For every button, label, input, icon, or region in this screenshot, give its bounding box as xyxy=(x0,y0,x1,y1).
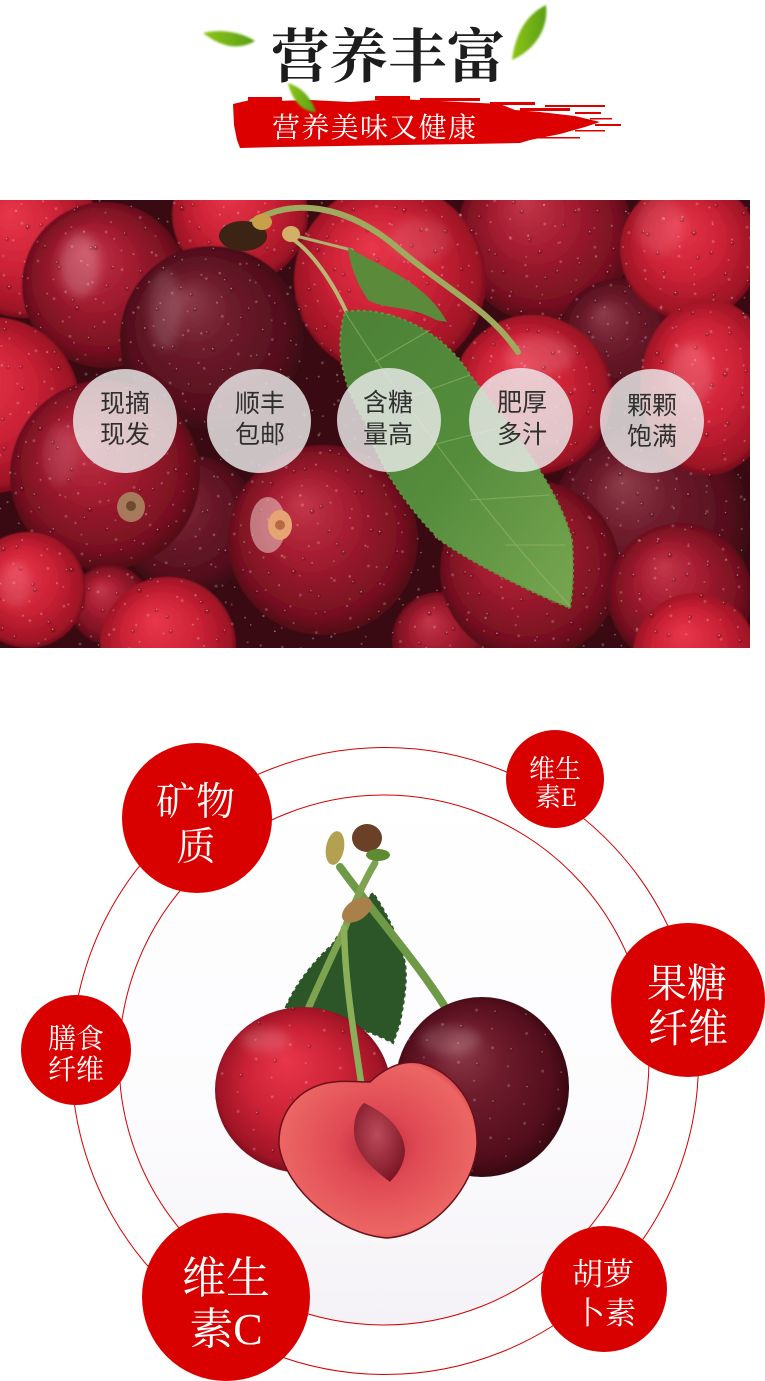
inner ring with photo background xyxy=(119,795,649,1325)
title text: 营养丰富 xyxy=(271,25,505,90)
node: 胡萝卜素: 胡萝 xyxy=(572,1257,634,1292)
badge: 含糖量高: 含糖 xyxy=(363,389,413,417)
badge: 肥厚多汁 xyxy=(469,368,573,472)
badge: 顺丰包邮: 顺丰 xyxy=(235,390,285,418)
outer ring xyxy=(72,748,698,1374)
large leaf xyxy=(340,311,573,608)
badge: 顺丰包邮 xyxy=(207,369,311,473)
node: 维生素E: 素E xyxy=(535,783,577,812)
badge: 肥厚多汁: 多汁 xyxy=(497,421,547,449)
cherry pit xyxy=(354,1103,405,1182)
small leaf xyxy=(348,247,447,322)
node: 维生素E xyxy=(506,730,604,828)
badge: 顺丰包邮: 包邮 xyxy=(235,421,285,449)
node: 果糖纤维 xyxy=(611,923,765,1077)
node: 膳食纤维: 膳食 xyxy=(48,1023,104,1055)
node: 维生素E: 维生 xyxy=(529,755,581,784)
badge: 颗颗饱满: 颗颗 xyxy=(627,392,677,420)
node: 胡萝卜素: 卜素 xyxy=(574,1296,636,1331)
right cherry xyxy=(395,997,569,1177)
node: 矿物质 xyxy=(122,743,272,893)
badge: 现摘现发: 现发 xyxy=(100,421,150,449)
leaf veins xyxy=(345,312,570,606)
water droplets xyxy=(0,200,750,648)
node: 矿物质: 矿物 xyxy=(156,781,236,824)
middle stem xyxy=(344,928,361,1082)
node: 膳食纤维 xyxy=(21,995,131,1105)
badge: 现摘现发: 现摘 xyxy=(100,390,150,418)
badge: 肥厚多汁: 肥厚 xyxy=(497,389,547,417)
panel: nutrient ring diagram xyxy=(21,730,765,1381)
right stem xyxy=(340,867,450,1015)
badge: 颗颗饱满 xyxy=(600,369,704,473)
node: 果糖纤维: 纤维 xyxy=(648,1006,728,1051)
icon: middle leaf xyxy=(288,83,316,112)
node: 胡萝卜素 xyxy=(541,1226,667,1352)
photo: three cherries xyxy=(215,824,569,1238)
badge: 颗颗饱满: 饱满 xyxy=(627,423,677,451)
subtitle text: 营养美味又健康 xyxy=(272,112,476,144)
node: 维生素C: 素C xyxy=(189,1305,263,1354)
brush stroke banner xyxy=(233,96,621,148)
node: 维生素C xyxy=(142,1213,310,1381)
panel: cherry photo with feature badges xyxy=(0,147,765,717)
left cherry xyxy=(215,1007,391,1173)
badge: 含糖量高: 量高 xyxy=(363,421,413,449)
icon: right leaf xyxy=(512,5,546,60)
node: 果糖纤维: 果糖 xyxy=(647,961,727,1006)
header: title block xyxy=(203,5,621,148)
cut half cherry xyxy=(279,1062,477,1238)
cherry cluster xyxy=(0,200,750,648)
stems xyxy=(252,208,518,352)
dark leaf xyxy=(286,893,406,1043)
node: 矿物质: 质 xyxy=(176,826,216,869)
node: 维生素C: 维生 xyxy=(182,1254,270,1303)
calyx xyxy=(219,214,300,251)
specular highlights xyxy=(0,195,712,607)
node: 膳食纤维: 纤维 xyxy=(48,1054,104,1086)
left stem xyxy=(302,863,375,1023)
cherry dimples xyxy=(117,492,292,553)
icon: left leaf xyxy=(203,31,255,46)
stem tips xyxy=(323,824,390,928)
badge: 现摘现发 xyxy=(73,369,177,473)
badge: 含糖量高 xyxy=(337,368,441,472)
photo: wet cherries and leaf xyxy=(0,147,765,717)
